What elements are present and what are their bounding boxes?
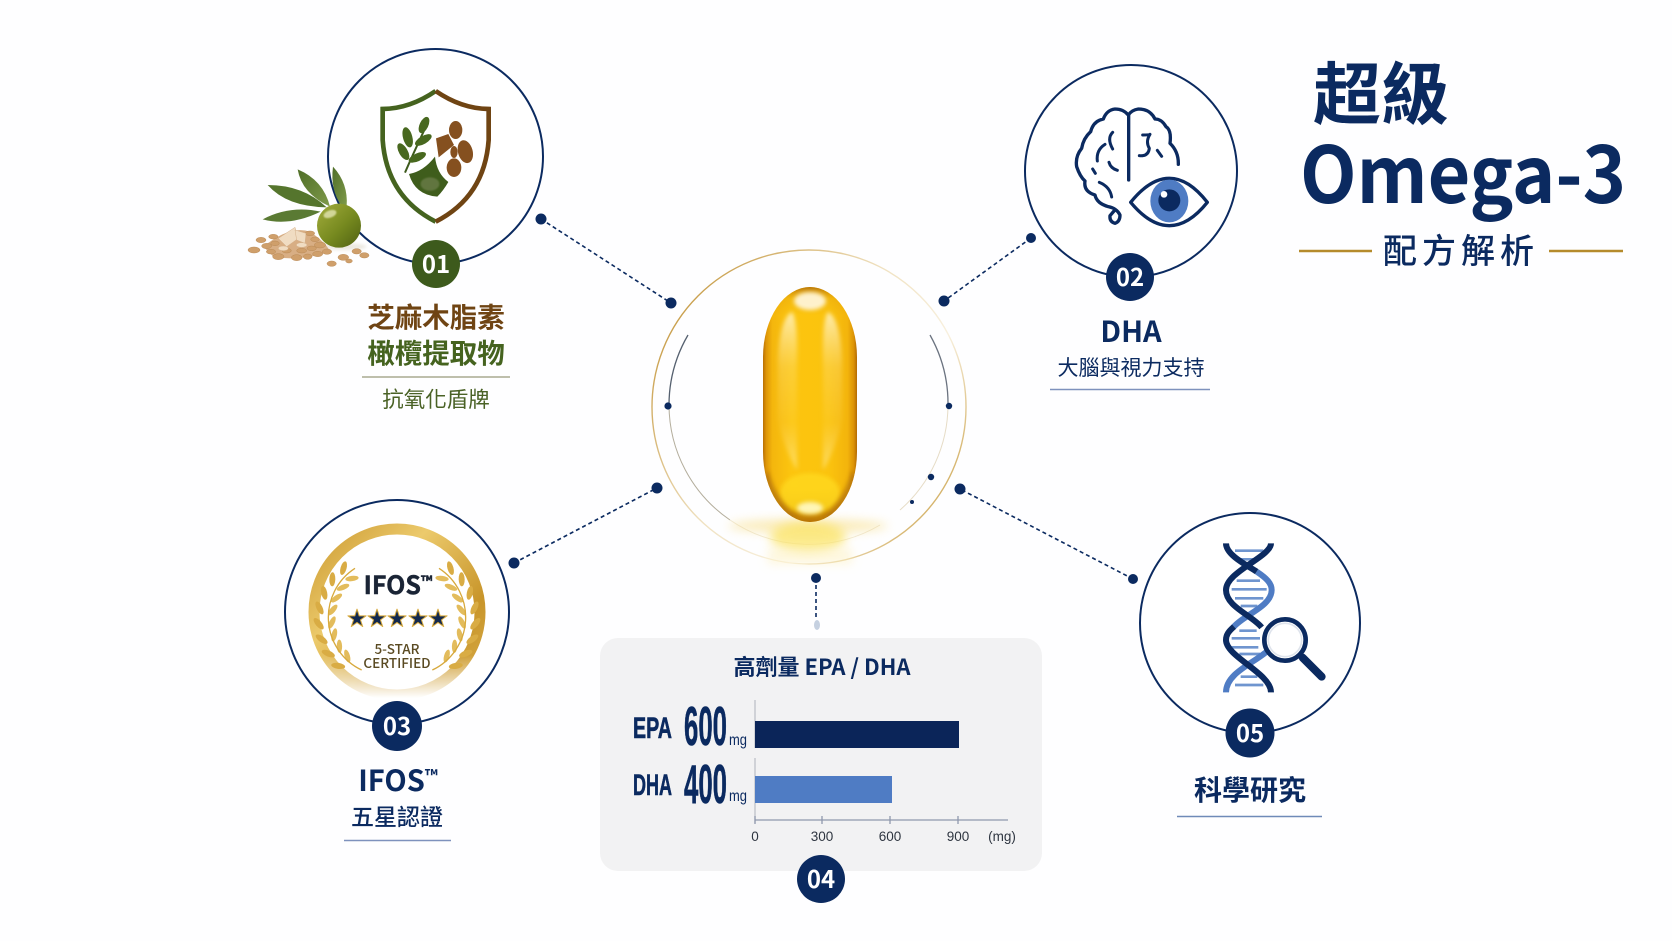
circle outline — [1140, 513, 1360, 733]
five stars: ★ — [408, 602, 428, 631]
heading: DHA: DHA — [1100, 309, 1162, 351]
axis labels: 900 — [947, 829, 969, 844]
heading: 科學研究 — [1194, 769, 1306, 809]
axis labels: 600 — [879, 829, 901, 844]
axis labels: 300 — [811, 829, 833, 844]
badge 02: 02 — [1116, 258, 1144, 293]
EPA label: 600 — [684, 695, 727, 757]
icon: gold medal — [311, 529, 483, 695]
DHA label — [633, 753, 747, 815]
medal text: ™ — [421, 571, 432, 592]
panel: 05 scientific research — [1140, 513, 1360, 816]
gold rules — [1299, 250, 1623, 252]
badge 01: 01 — [422, 245, 450, 280]
badge 03: 03 — [383, 707, 411, 742]
heading: sesame lignan olive extract — [367, 295, 505, 371]
divider — [1050, 388, 1210, 390]
subheading: 五星認證 — [351, 798, 443, 832]
EPA bar — [755, 721, 959, 748]
heading: sesame lignan olive extract: 橄欖提取物 — [367, 331, 505, 371]
axis — [755, 816, 1008, 824]
axis labels: (mg) — [988, 829, 1016, 844]
DHA label: 400 — [684, 753, 727, 815]
circle outline — [1025, 65, 1237, 277]
certified text — [363, 638, 431, 672]
badge 01 — [412, 240, 460, 288]
circle outline — [285, 500, 509, 724]
five stars: ★ — [387, 602, 407, 631]
DHA bar — [755, 776, 892, 803]
heading: IFOS: IFOS — [358, 758, 425, 800]
heading: IFOS: ™ — [425, 762, 438, 787]
infographic canvas — [248, 48, 1623, 903]
panel: 02 DHA — [1025, 65, 1237, 390]
divider — [344, 840, 451, 842]
heading: sesame lignan olive extract: 芝麻木脂素 — [367, 295, 505, 335]
panel: 03 IFOS — [285, 500, 509, 840]
gold outer ring — [652, 250, 966, 564]
circle outline — [328, 49, 543, 264]
title: super: 超級 — [1313, 40, 1449, 139]
subtitle: 配方解析 — [1383, 224, 1539, 273]
medal text: IFOS — [364, 566, 421, 602]
axis labels: 0 — [751, 829, 759, 844]
EPA label: EPA — [633, 712, 672, 745]
five stars: ★ — [428, 602, 448, 631]
subheading: 抗氧化盾牌 — [382, 383, 490, 414]
divider — [362, 376, 510, 378]
softgel capsule — [762, 287, 858, 522]
panel: 04 EPA DHA chart — [600, 638, 1042, 903]
inner ring — [664, 335, 952, 544]
DHA label: DHA — [633, 769, 672, 802]
DHA label: mg — [729, 788, 747, 805]
panel: 01 antioxidant shield — [248, 49, 543, 414]
certified text: CERTIFIED — [363, 652, 431, 672]
laurel left — [311, 558, 362, 676]
bar chart — [751, 700, 1016, 844]
certified text: 5-STAR — [374, 638, 420, 658]
five stars: ★ — [367, 602, 387, 631]
panel: central capsule — [652, 250, 966, 564]
icon: shield — [383, 91, 489, 222]
EPA label: mg — [729, 732, 747, 749]
title — [1299, 40, 1626, 273]
connector lines — [514, 219, 1133, 618]
laurel right — [432, 558, 483, 676]
badge 03 — [372, 701, 422, 751]
five stars — [347, 602, 448, 631]
divider — [1177, 816, 1322, 818]
badge 04: 04 — [807, 860, 835, 895]
connector dots — [508, 214, 1138, 630]
icon: brain and eye — [1076, 109, 1207, 226]
icon: DNA and magnifier — [1226, 543, 1322, 692]
chart title: 高劑量 EPA / DHA — [733, 650, 911, 682]
EPA label — [633, 695, 747, 757]
axis labels — [751, 829, 1016, 844]
badge 04 — [797, 855, 845, 903]
icon: olive and sesame seeds — [248, 167, 369, 266]
card — [600, 638, 1042, 871]
title: Omega-3: Omega-3 — [1300, 114, 1626, 226]
capsule reflection — [728, 519, 888, 564]
badge 05 — [1226, 708, 1274, 758]
subheading: 大腦與視力支持 — [1058, 352, 1204, 382]
badge 05: 05 — [1236, 714, 1264, 749]
badge 02 — [1106, 253, 1154, 301]
five stars: ★ — [347, 602, 367, 631]
